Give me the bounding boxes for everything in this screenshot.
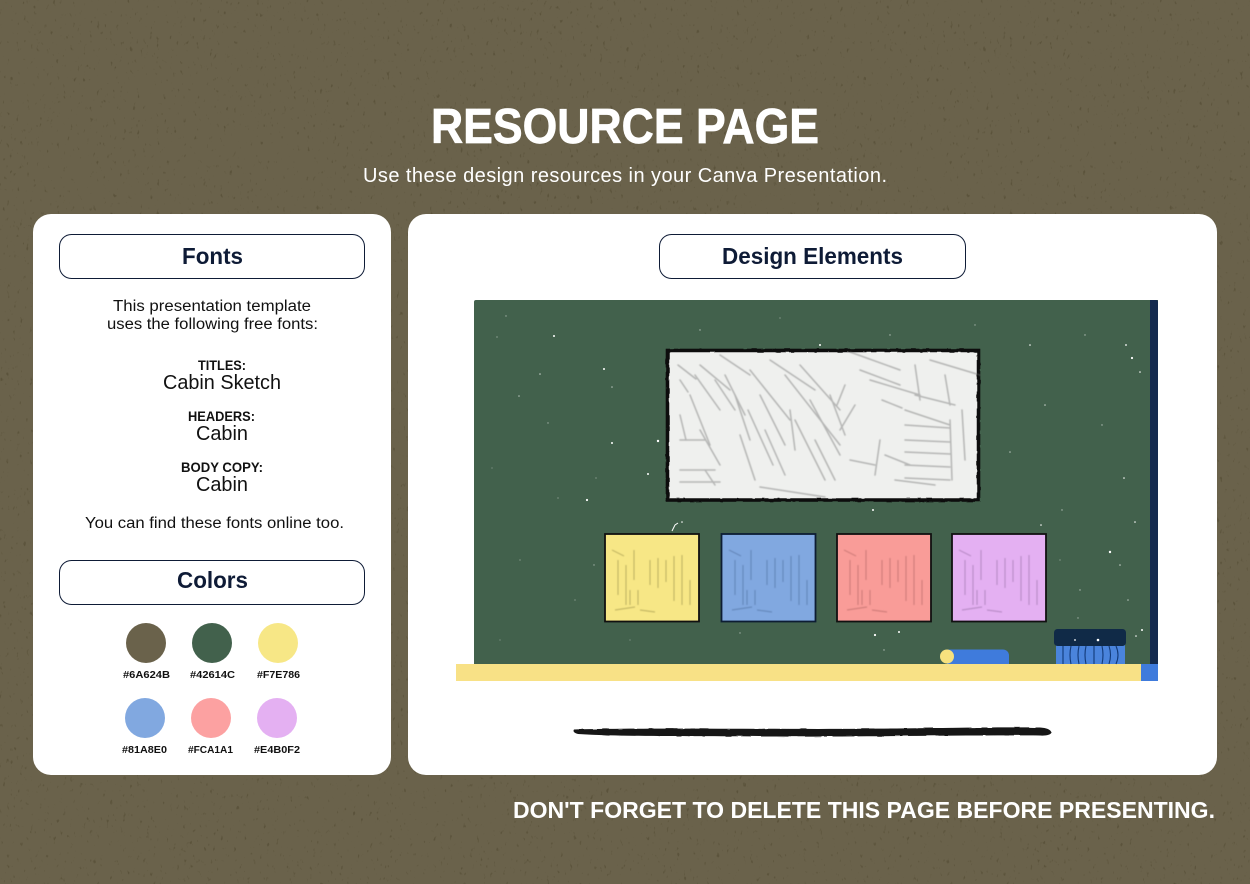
heading: fonts xyxy=(60,234,364,278)
board right edge xyxy=(1150,300,1158,664)
swatch: 6A624B: #6A624B xyxy=(123,669,170,681)
swatch: 42614C: #42614C xyxy=(190,669,235,681)
swatch: E4B0F2 xyxy=(254,698,300,756)
text block: titles font xyxy=(163,358,281,394)
chalk stroke line xyxy=(574,727,1052,737)
text block: headers font: Cabin xyxy=(196,423,248,445)
text block: fonts intro: This presentation template xyxy=(113,298,311,315)
text block: body copy font: Cabin xyxy=(196,474,248,496)
blue chalk stick xyxy=(940,650,1009,664)
heading: fonts: Fonts xyxy=(182,243,243,269)
text block: titles font: Cabin Sketch xyxy=(163,372,281,394)
text block: fonts intro: uses the following free fonts: xyxy=(107,316,318,333)
heading: colors xyxy=(60,560,364,604)
text block: titles font: TITLES: xyxy=(198,358,246,373)
swatch: FCA1A1: #FCA1A1 xyxy=(188,744,233,756)
swatch: E4B0F2: #E4B0F2 xyxy=(254,744,300,756)
panel: fonts and colors xyxy=(33,214,391,775)
heading: design elements: Design Elements xyxy=(722,243,903,269)
heading: colors: Colors xyxy=(177,567,248,593)
text block: body copy font xyxy=(181,460,263,496)
text block: body copy font: BODY COPY: xyxy=(181,460,263,475)
swatch: F7E786: #F7E786 xyxy=(257,669,300,681)
text block: headers font: HEADERS: xyxy=(188,409,255,424)
purple square xyxy=(952,534,1046,622)
swatch: 81A8E0 xyxy=(122,698,167,756)
swatch: FCA1A1 xyxy=(188,698,233,756)
swatch: F7E786 xyxy=(257,623,300,681)
large white chalk rectangle xyxy=(668,350,980,500)
board surface xyxy=(474,300,1158,664)
title: RESOURCE PAGE xyxy=(431,100,819,154)
subtitle: Use these design resources in your Canva Presentation. xyxy=(363,165,887,187)
swatch: 6A624B xyxy=(123,623,170,681)
blue square xyxy=(722,534,816,622)
footer note: DON'T FORGET TO DELETE THIS PAGE BEFORE PRESENTING. xyxy=(513,797,1215,823)
chalk dust specks xyxy=(491,315,1143,651)
swatch: 42614C xyxy=(190,623,235,681)
text block: headers font xyxy=(188,409,255,445)
yellow square xyxy=(605,534,699,622)
text block: fonts note: You can find these fonts online too. xyxy=(85,515,344,532)
chalk tray xyxy=(456,664,1158,681)
text block: fonts intro xyxy=(107,298,318,333)
swatch: 81A8E0: #81A8E0 xyxy=(122,744,167,756)
heading: design elements xyxy=(660,234,966,278)
pink square xyxy=(837,534,931,622)
illustration: chalkboard xyxy=(456,300,1158,681)
eraser xyxy=(1054,629,1126,664)
panel: design elements xyxy=(408,214,1217,775)
